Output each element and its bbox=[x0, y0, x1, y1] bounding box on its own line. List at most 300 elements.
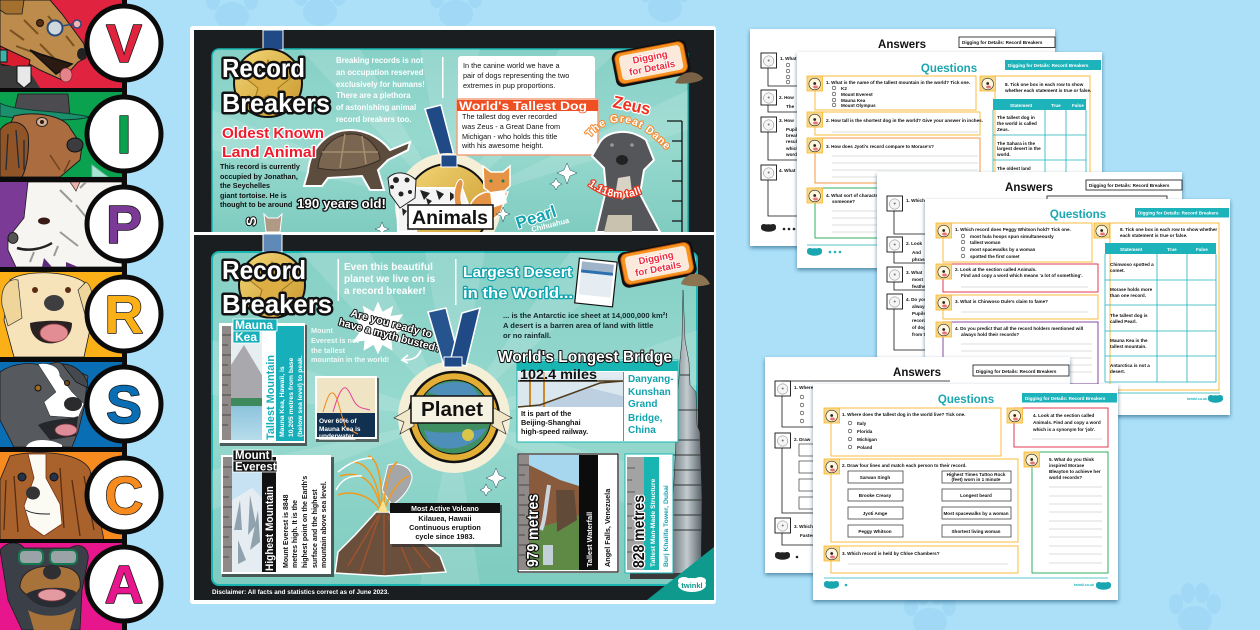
true or false table: Chinwoso spotted a bbox=[1110, 262, 1154, 267]
question 3 bbox=[807, 138, 980, 183]
card: Mount Everest: metres high. It is the bbox=[292, 500, 299, 568]
question 4 bbox=[936, 322, 1098, 384]
question 5 bbox=[1024, 452, 1108, 573]
dalmatian bbox=[388, 173, 468, 232]
text: desert fact bbox=[503, 311, 668, 340]
true or false table: The Sahara is the bbox=[997, 141, 1035, 146]
answer items: of dogs bbox=[912, 325, 929, 330]
intro text: exclusively for humans! bbox=[336, 80, 425, 89]
panel: animals poster bbox=[190, 26, 716, 234]
question 1: Mauna Kea bbox=[841, 98, 866, 103]
orange box: World's Tallest Dog: was Zeus - a Great Dane from bbox=[461, 122, 560, 131]
letter badge C: C bbox=[104, 466, 144, 526]
ribbon of animals medal bbox=[425, 105, 456, 166]
intro text: a record breaker! bbox=[344, 286, 426, 297]
question 1: most hula hoops spun simultaneously bbox=[970, 234, 1054, 239]
true or false table: False bbox=[1072, 103, 1084, 108]
true or false table bbox=[1094, 223, 1219, 390]
true or false table: desert. bbox=[1110, 369, 1125, 374]
true or false table: True bbox=[1167, 247, 1177, 252]
twinkl corner and logo: twinkl bbox=[681, 581, 703, 590]
heading: Answers: Answers bbox=[893, 367, 941, 379]
question 3 bbox=[824, 546, 1018, 573]
answer items: 3. What bbox=[906, 270, 923, 275]
heading: Questions: Questions bbox=[1050, 209, 1106, 221]
dirt mound bbox=[675, 72, 703, 84]
badge: Digging for Details: Digging bbox=[638, 250, 675, 267]
question 1: Michigan bbox=[857, 437, 877, 442]
answer items bbox=[761, 53, 800, 216]
card: World's Longest Bridge: high-speed railway. bbox=[521, 427, 588, 436]
true or false table: Antarctica is not a bbox=[1110, 363, 1150, 368]
tortoise bbox=[304, 130, 410, 190]
intro text: There are a plethora bbox=[336, 91, 411, 100]
text: Everest myth: mountain in the world! bbox=[311, 355, 389, 364]
question 2: matching: 2. Draw four lines and match each person to their record. bbox=[842, 463, 967, 468]
text: tortoise record: occupied by Jonathan, bbox=[220, 172, 298, 181]
footer: twinkl.co.uk bbox=[1187, 397, 1207, 401]
intro text: Breaking records is not bbox=[336, 56, 423, 65]
animals medal bbox=[395, 153, 501, 259]
card: World's Longest Bridge bbox=[517, 360, 678, 442]
orange box: World's Tallest Dog: The tallest dog ever recorded bbox=[462, 112, 557, 121]
letter badge I bbox=[87, 97, 161, 171]
true or false table: Morase holds more bbox=[1110, 287, 1153, 292]
question 2: 2. Look at the section called Animals. bbox=[955, 267, 1037, 272]
tag: Digging for Details: Record Breakers bbox=[976, 369, 1057, 374]
text: Everest myth: Mount bbox=[311, 326, 333, 335]
question 2: matching: Most spacewalks by a woman bbox=[943, 511, 1009, 516]
Pearl label: Pearl bbox=[513, 202, 559, 233]
volcano bbox=[335, 456, 446, 576]
answer items: 2. Draw bbox=[794, 437, 811, 442]
letter badge A bbox=[87, 547, 161, 621]
true or false table: called Pearl. bbox=[1110, 319, 1137, 324]
heading: Oldest Known Land Animal: Land Animal bbox=[222, 144, 316, 161]
intro text: of astonishing animal bbox=[336, 103, 416, 112]
card: World's Longest Bridge: Grand bbox=[628, 399, 657, 410]
medal behind title bbox=[234, 30, 302, 117]
answer items: from the bbox=[912, 332, 931, 337]
heading: Oldest Known Land Animal bbox=[222, 125, 324, 161]
title: Record Breakers: Breakers bbox=[222, 289, 332, 319]
black dividers between strips bbox=[0, 0, 127, 630]
question 3: 3. How does Jyoti's record compare to Morase's? bbox=[826, 144, 934, 149]
question 2: 2. How tall is the shortest dog in the world? Give your answer in inches. bbox=[826, 118, 983, 123]
badge: Digging for Details bbox=[610, 38, 692, 88]
panel: planet poster bbox=[190, 232, 716, 604]
question 1: 1. Which record does Peggy Whitson hold? Tick one. bbox=[955, 227, 1071, 232]
Animals label: Animals bbox=[412, 208, 488, 229]
answer items: 2. Look bbox=[906, 241, 923, 246]
question 2: matching: Jyoti Amge bbox=[863, 511, 888, 516]
card: Most Active Volcano: cycle since 1983. bbox=[415, 532, 475, 541]
strip: R yellow with golden retriever bbox=[0, 272, 122, 357]
question 4: 4. Look at the section called bbox=[1033, 413, 1094, 418]
footer bbox=[824, 578, 1111, 590]
letter badge A: A bbox=[104, 555, 144, 615]
card: Most Active Volcano: Continuous eruption bbox=[409, 523, 481, 532]
text: Everest myth bbox=[311, 326, 389, 364]
tag bbox=[959, 37, 1055, 48]
medal behind title bbox=[239, 234, 305, 318]
question 4: 4. Do you predict that all the record holders mentioned will bbox=[955, 326, 1083, 331]
twinkl corner and logo bbox=[647, 547, 714, 600]
text: desert fact: ... is the Antarctic ice sheet at 14,000,000 km²! bbox=[503, 311, 668, 320]
true or false table: Statement bbox=[1120, 247, 1143, 252]
answer items: most bbox=[912, 277, 923, 282]
true or false table: the world is called bbox=[997, 121, 1037, 126]
text: tortoise record: giant tortoise. He is bbox=[220, 191, 287, 200]
answer items: 1. What bbox=[780, 56, 797, 61]
answer items: which bbox=[785, 146, 799, 151]
answer items: Pupils bbox=[912, 311, 926, 316]
disclaimer: Disclaimer: All facts and statistics correct as of June 2023. bbox=[212, 589, 389, 596]
question 1: K2 bbox=[841, 86, 847, 91]
text box: canine world bbox=[458, 56, 595, 104]
intro text: planet we live on is bbox=[344, 274, 436, 285]
text: tortoise record: This record is currently bbox=[220, 162, 300, 171]
footer bbox=[1100, 393, 1223, 403]
card: World's Longest Bridge: China bbox=[628, 425, 656, 436]
orange box: World's Tallest Dog: World's Tallest Dog bbox=[459, 99, 587, 113]
heading: Largest Desert in the World: Largest Desert bbox=[463, 264, 572, 281]
true or false table: 8. Tick one box in each row to show bbox=[1005, 82, 1084, 87]
tag: Digging for Details: Record Breakers bbox=[1008, 63, 1089, 68]
letter badge R: R bbox=[104, 285, 144, 345]
answer items: always bbox=[912, 304, 928, 309]
sparkles bbox=[480, 468, 506, 496]
letter badge I: I bbox=[116, 105, 132, 165]
letter badge V bbox=[87, 6, 161, 80]
question 1: Mount Olympus bbox=[841, 103, 876, 108]
card: Mauna Kea: Mauna bbox=[235, 318, 273, 332]
card: Most Active Volcano bbox=[390, 503, 502, 547]
answer items: 1. Where bbox=[794, 385, 814, 390]
card: Most Active Volcano: Kilauea, Hawaii bbox=[418, 514, 472, 523]
card: Mauna Kea: 10,205 metres from base bbox=[288, 357, 295, 437]
answer items: Fastest bbox=[800, 533, 817, 538]
callout: myth busted: have a myth busted? bbox=[337, 316, 443, 355]
footer logo bbox=[775, 552, 798, 560]
question 3 bbox=[936, 295, 1098, 319]
answer items: records bbox=[912, 318, 929, 323]
question 5: 5. What do you think bbox=[1049, 457, 1094, 462]
letter badge V: V bbox=[106, 14, 142, 74]
question 1: 1. Where does the tallest dog in the world live? Tick one. bbox=[842, 412, 965, 417]
tag bbox=[1022, 393, 1117, 402]
letter badge C bbox=[87, 458, 161, 532]
question 5: inspired Morase bbox=[1049, 463, 1085, 468]
ginger cat bbox=[454, 166, 510, 226]
card: Mount Everest: Everest bbox=[235, 462, 277, 474]
question 4: someone? bbox=[832, 199, 855, 204]
height label: 1.118m tall bbox=[587, 179, 642, 199]
tag bbox=[973, 365, 1069, 376]
question 1: most spacewalks by a woman bbox=[970, 247, 1036, 252]
question 4: Animals. Find and copy a word bbox=[1033, 420, 1101, 425]
card: underwater graph bbox=[315, 376, 379, 442]
card: Burj Khalifa: 828 metres bbox=[631, 495, 648, 568]
true or false table: Zeus. bbox=[997, 127, 1009, 132]
question 1: Mount Everest bbox=[841, 92, 873, 97]
callout: myth busted: Are you ready to bbox=[349, 307, 433, 341]
card: Mount Everest: surface and the highest bbox=[312, 489, 319, 568]
strip: I green with bloodhound in hat bbox=[0, 92, 122, 177]
true or false table: whether each statement is true or false. bbox=[1004, 88, 1091, 93]
tag: Digging for Details: Record Breakers bbox=[1138, 210, 1219, 216]
answer items: result bbox=[786, 139, 799, 144]
small cat and cut-off letters: S bbox=[243, 217, 259, 226]
question 2 bbox=[936, 264, 1098, 292]
badge: Digging for Details: for Details bbox=[628, 59, 676, 78]
sheet: answers 2 bbox=[877, 172, 1182, 388]
true or false table: largest desert in the bbox=[997, 146, 1041, 151]
card: Mauna Kea bbox=[219, 318, 307, 446]
text: Everest myth: Everest is not bbox=[311, 336, 359, 345]
true or false table: True bbox=[1051, 103, 1061, 108]
orange box: World's Tallest Dog: Michigan - who holds this title bbox=[462, 132, 557, 141]
card: Mount Everest: highest point on the Earth's bbox=[302, 476, 309, 568]
question 3: 3. Which record is held by Chloe Chambers? bbox=[842, 551, 940, 556]
orange box: World's Tallest Dog bbox=[457, 99, 598, 155]
true or false table: than one record. bbox=[1110, 293, 1146, 298]
question 1: Poland bbox=[857, 445, 873, 450]
question 2: matching: Shortest living woman bbox=[951, 529, 1001, 534]
card: World's Longest Bridge: It is part of the bbox=[521, 409, 571, 418]
text: Everest myth: the tallest bbox=[311, 346, 346, 355]
badge: Digging for Details: Digging bbox=[632, 49, 669, 67]
great dane Zeus bbox=[592, 132, 660, 232]
heading: Oldest Known Land Animal: Oldest Known bbox=[222, 125, 324, 142]
height ruler bbox=[667, 121, 682, 232]
Zeus heading: The Great Dane bbox=[584, 114, 670, 150]
heading: Questions: Questions bbox=[938, 394, 994, 406]
question 4 bbox=[807, 188, 980, 238]
card: Burj Khalifa: Burj Khalifa Tower, Dubai bbox=[663, 485, 670, 567]
planet medal: Planet bbox=[421, 399, 483, 421]
card: Mount Everest: mountain above sea level. bbox=[321, 481, 328, 568]
text: tortoise record: thought to be around bbox=[220, 200, 292, 209]
footer: twinkl.co.uk bbox=[1074, 583, 1094, 587]
sheet: answers 3 bbox=[765, 357, 1070, 573]
question 2: matching: Brooke Creasy bbox=[859, 493, 892, 498]
question 1 bbox=[807, 76, 976, 110]
true or false table: The tallest dog in bbox=[997, 115, 1035, 120]
true or false table: comet. bbox=[1110, 268, 1125, 273]
answer items: break bbox=[786, 133, 799, 138]
question 2: Find and copy a word which means 'a lot of something'. bbox=[961, 273, 1083, 278]
card: underwater graph: underwater. bbox=[319, 433, 356, 440]
question 1: Florida bbox=[857, 429, 873, 434]
true or false table: Statement bbox=[1010, 103, 1033, 108]
question 2: matching: Sarwan Singh bbox=[860, 475, 890, 480]
true or false table: Mauna Kea is the bbox=[1110, 338, 1148, 343]
divider bbox=[338, 259, 339, 301]
tag: Digging for Details: Record Breakers bbox=[1025, 396, 1106, 401]
divider bbox=[442, 57, 444, 98]
question 2 bbox=[807, 112, 983, 135]
true or false table: tallest mountain. bbox=[1110, 344, 1146, 349]
planet medal bbox=[394, 308, 512, 473]
question 1 bbox=[824, 408, 1001, 456]
answer items: 4. What bbox=[779, 168, 796, 173]
sheet: questions 2 bbox=[925, 199, 1230, 415]
text: tortoise record bbox=[220, 162, 300, 209]
heading: Answers: Answers bbox=[1005, 182, 1053, 194]
card: underwater graph: Mauna Kea is bbox=[319, 426, 361, 433]
question 4: 4. What sort of character do you think bbox=[826, 193, 909, 198]
question 1: 1. What is the name of the tallest mountain in the world? Tick one. bbox=[826, 80, 970, 85]
heading: Largest Desert in the World bbox=[463, 264, 573, 302]
footer bbox=[807, 245, 960, 256]
card: Mount Everest: Mount bbox=[235, 450, 270, 462]
true or false table: each statement is true or false. bbox=[1120, 233, 1187, 238]
question 2: matching: Peggy Whitson bbox=[858, 529, 892, 534]
question 4: which is a synonym for 'job'. bbox=[1032, 427, 1095, 432]
true or false table: False bbox=[1196, 247, 1208, 252]
card: Most Active Volcano: Most Active Volcano bbox=[411, 506, 479, 513]
answer items: 3. How bbox=[779, 118, 794, 123]
small cat and cut-off letters bbox=[243, 214, 282, 232]
card: Mount Everest bbox=[221, 450, 334, 577]
question 1: tallest woman bbox=[970, 240, 1001, 245]
answer items: 1. Which bbox=[906, 198, 925, 203]
intro text: record breakers too. bbox=[336, 115, 411, 124]
tag bbox=[1005, 60, 1101, 70]
answer items: word bbox=[785, 152, 797, 157]
answer items bbox=[775, 381, 950, 545]
question 4 bbox=[1007, 408, 1108, 447]
card: Angel Falls: Angel Falls, Venezuela bbox=[603, 488, 612, 567]
card: Burj Khalifa bbox=[625, 454, 673, 573]
question 2: matching bbox=[824, 459, 1018, 542]
polaroid: Antarctic photo bbox=[575, 258, 617, 307]
strip: V red with airedale dog bbox=[0, 0, 122, 88]
heading: Answers: Answers bbox=[878, 39, 926, 51]
letter badge S bbox=[87, 367, 161, 441]
heading: Questions: Questions bbox=[921, 63, 977, 75]
question 1 bbox=[936, 223, 1092, 262]
text box: canine world: extremes in pup proportions. bbox=[463, 81, 555, 90]
card: Mauna Kea: Kea bbox=[235, 330, 257, 344]
intro text bbox=[336, 56, 425, 124]
strip: C orange with cavalier spaniel bbox=[0, 452, 122, 540]
answer items: The bbox=[786, 104, 795, 109]
card: World's Longest Bridge: Beijing-Shanghai bbox=[521, 418, 581, 427]
tag: Digging for Details: Record Breakers bbox=[962, 40, 1043, 45]
question 1: spotted the first comet bbox=[970, 254, 1020, 259]
strip: A pink with rottweiler in glasses bbox=[0, 543, 122, 630]
intro text: Even this beautiful bbox=[344, 262, 433, 273]
card: Angel Falls bbox=[517, 453, 619, 573]
card: Mount Everest: Mount Everest is 8848 bbox=[283, 494, 290, 568]
intro text: an occupation reserved bbox=[336, 68, 424, 77]
arrow bbox=[402, 350, 421, 363]
question 2: matching: Highest Times Tattoo Rock bbox=[947, 472, 1006, 477]
letter badge R bbox=[87, 277, 161, 351]
true or false table: 8. Tick one box in each row to show whether bbox=[1120, 227, 1217, 232]
badge: Digging for Details bbox=[616, 239, 698, 289]
tag bbox=[1135, 208, 1229, 218]
text: desert fact: or no rainfall. bbox=[503, 331, 551, 340]
card: Mauna Kea: Mauna Kea, Hawaii, is bbox=[279, 366, 286, 437]
footer logo bbox=[761, 224, 795, 232]
card: Angel Falls: Tallest Waterfall bbox=[585, 512, 594, 567]
card: Angel Falls: 979 metres bbox=[525, 494, 542, 567]
question 2: matching: (feet) worn in 1 minute bbox=[951, 477, 1001, 482]
burj khalifa tower bbox=[630, 290, 702, 579]
sheet: questions 1 bbox=[797, 52, 1102, 268]
sparkles bbox=[375, 163, 577, 235]
orange box: World's Tallest Dog: with his awesome height. bbox=[461, 141, 544, 150]
sheet: answers 1 bbox=[750, 29, 1055, 246]
question 1: Italy bbox=[857, 421, 867, 426]
card: Mount Everest: Highest Mountain bbox=[264, 486, 276, 571]
divider bbox=[455, 259, 456, 305]
answer items: phrase bbox=[912, 257, 928, 262]
answer items: Pupil bbox=[786, 127, 797, 132]
text: tortoise record: the Seychelles bbox=[220, 181, 270, 190]
tag: Digging for Details: Record Breakers bbox=[1089, 183, 1170, 188]
text box: canine world: In the canine world we have a bbox=[463, 61, 560, 70]
answer items: 2. How bbox=[779, 95, 794, 100]
heading: World's Longest Bridge: World's Longest Bridge bbox=[498, 349, 672, 366]
Zeus heading bbox=[584, 92, 670, 150]
dirt mound bbox=[681, 274, 710, 286]
card: World's Longest Bridge: Bridge, bbox=[628, 413, 663, 424]
question 5: world records? bbox=[1048, 475, 1082, 480]
answer items: 3. Which bbox=[794, 524, 813, 529]
title: Record Breakers: Record bbox=[222, 53, 305, 83]
card: Mauna Kea: (below sea level) to peak. bbox=[297, 355, 304, 437]
card: underwater graph: Over 60% of bbox=[319, 418, 357, 425]
badge: Digging for Details: for Details bbox=[634, 260, 682, 279]
true or false table: The tallest dog is bbox=[1110, 313, 1148, 318]
true or false table: world. bbox=[996, 152, 1011, 157]
text: desert fact: A desert is a barren area of land with little bbox=[503, 321, 653, 330]
Chihuahua label: Chihuahua bbox=[530, 216, 571, 234]
title: Record Breakers: Breakers bbox=[222, 88, 330, 118]
callout: 190 years old: 190 years old! bbox=[297, 197, 386, 211]
card: World's Longest Bridge: Danyang- bbox=[628, 374, 674, 385]
true or false table: The oldest land bbox=[997, 166, 1031, 171]
question 4: always hold their records? bbox=[961, 332, 1019, 337]
title: Record Breakers bbox=[222, 53, 330, 118]
strip: S blue with border collie bbox=[0, 362, 122, 447]
tag bbox=[1086, 180, 1182, 190]
Zeus heading: Zeus bbox=[611, 92, 652, 119]
answer items: feather bbox=[912, 284, 928, 289]
heading: Largest Desert in the World: in the World... bbox=[463, 285, 573, 302]
question 5: Bleayton to achieve her bbox=[1049, 469, 1101, 474]
card: Mauna Kea: Tallest Mountain bbox=[265, 355, 277, 440]
card: Burj Khalifa: Tallest Man-Made Structure bbox=[650, 479, 657, 567]
letter badge S: S bbox=[106, 375, 142, 435]
letter badge P: P bbox=[106, 195, 142, 255]
answer items: 4. Do you bbox=[906, 297, 927, 302]
answer items: And bbox=[912, 250, 921, 255]
card: World's Longest Bridge: 102.4 miles bbox=[520, 366, 597, 382]
question 2: matching: Longest beard bbox=[960, 493, 992, 498]
answer items bbox=[887, 196, 1167, 350]
letter badge P bbox=[87, 187, 161, 261]
title: Record Breakers bbox=[222, 255, 332, 319]
question 3: 3. What is Chinwoso Dule's claim to fame? bbox=[955, 299, 1048, 304]
text box: canine world: pair of dogs representing the two bbox=[463, 71, 569, 80]
sheet: questions 3 bbox=[813, 384, 1118, 600]
strip: P purple with white dog bbox=[0, 182, 122, 267]
